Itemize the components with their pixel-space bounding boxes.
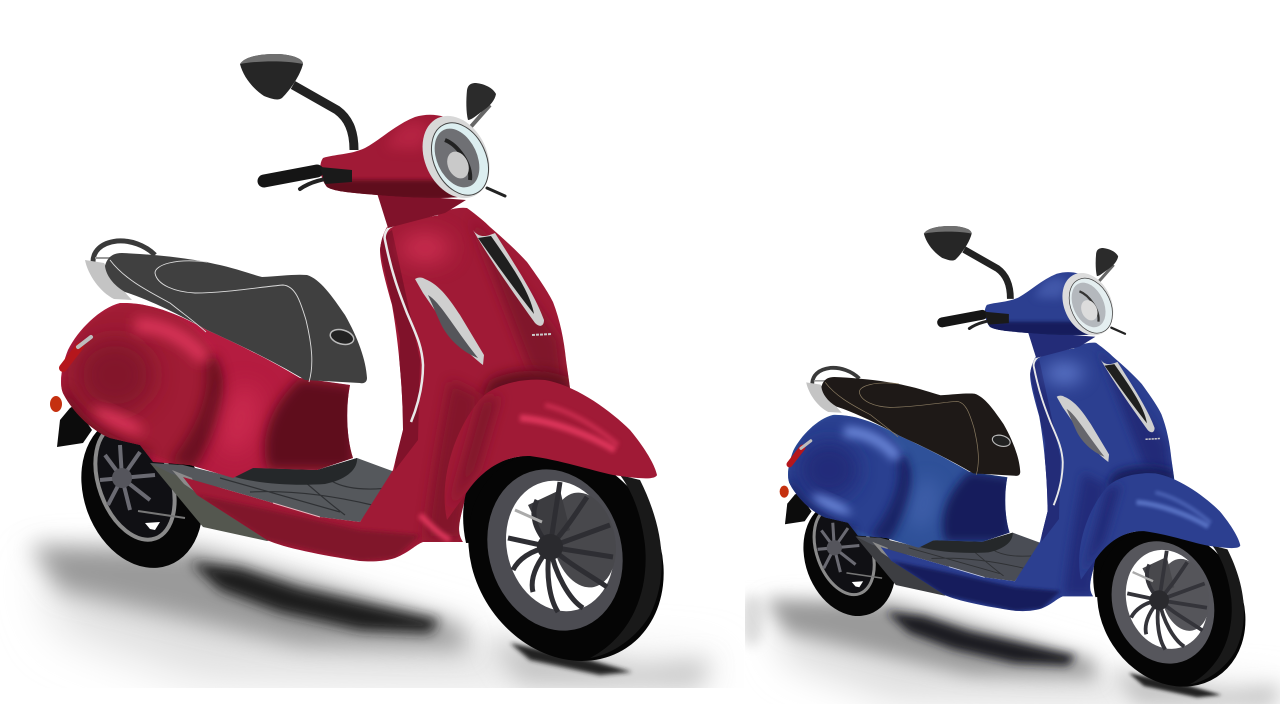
leg shield and sill (170, 200, 580, 570)
ground shadow: blue scooter (740, 594, 1280, 707)
scooter: blue (780, 226, 1246, 687)
tail lamps (50, 337, 91, 412)
right mirror (1096, 248, 1118, 284)
badge (1145, 438, 1161, 440)
floorboard and undertray (856, 533, 1042, 596)
steering head (984, 272, 1090, 336)
front wheel (1067, 499, 1275, 715)
upper vent (1101, 360, 1155, 432)
floorboard and undertray (150, 458, 395, 541)
floor trim (273, 503, 320, 517)
handlebar (942, 312, 1009, 328)
rear rail (85, 241, 155, 300)
handlebar (264, 167, 352, 189)
side vent (1057, 396, 1109, 462)
rear body panel (788, 414, 1010, 548)
steering head (320, 114, 458, 198)
rear wheel (788, 488, 911, 629)
rear mudguard (785, 492, 812, 524)
tail lamps (780, 441, 811, 498)
badge (532, 334, 552, 335)
rear wheel (61, 399, 223, 585)
rear body panel (61, 303, 353, 478)
rear mudguard (57, 405, 92, 447)
side vent (415, 278, 484, 365)
front fender (444, 380, 657, 520)
headlight (1053, 265, 1123, 344)
right mirror (466, 83, 496, 130)
scooter: red (50, 54, 664, 661)
trim line (385, 214, 438, 422)
front wheel (429, 414, 703, 698)
neck (1028, 331, 1095, 358)
upper vent (473, 230, 544, 326)
rear rail (806, 368, 859, 413)
left mirror (924, 226, 1010, 299)
floor trim (949, 567, 985, 577)
indicator stalk (487, 188, 505, 196)
front fender (1079, 473, 1240, 580)
seat (821, 377, 1020, 476)
neck (377, 193, 466, 228)
seat (105, 253, 367, 383)
indicator stalk (1111, 328, 1125, 334)
trim line (1034, 347, 1074, 505)
ground shadow: red scooter (30, 545, 720, 688)
leg shield and sill (871, 337, 1182, 618)
left mirror (240, 54, 354, 150)
headlight (410, 105, 502, 209)
